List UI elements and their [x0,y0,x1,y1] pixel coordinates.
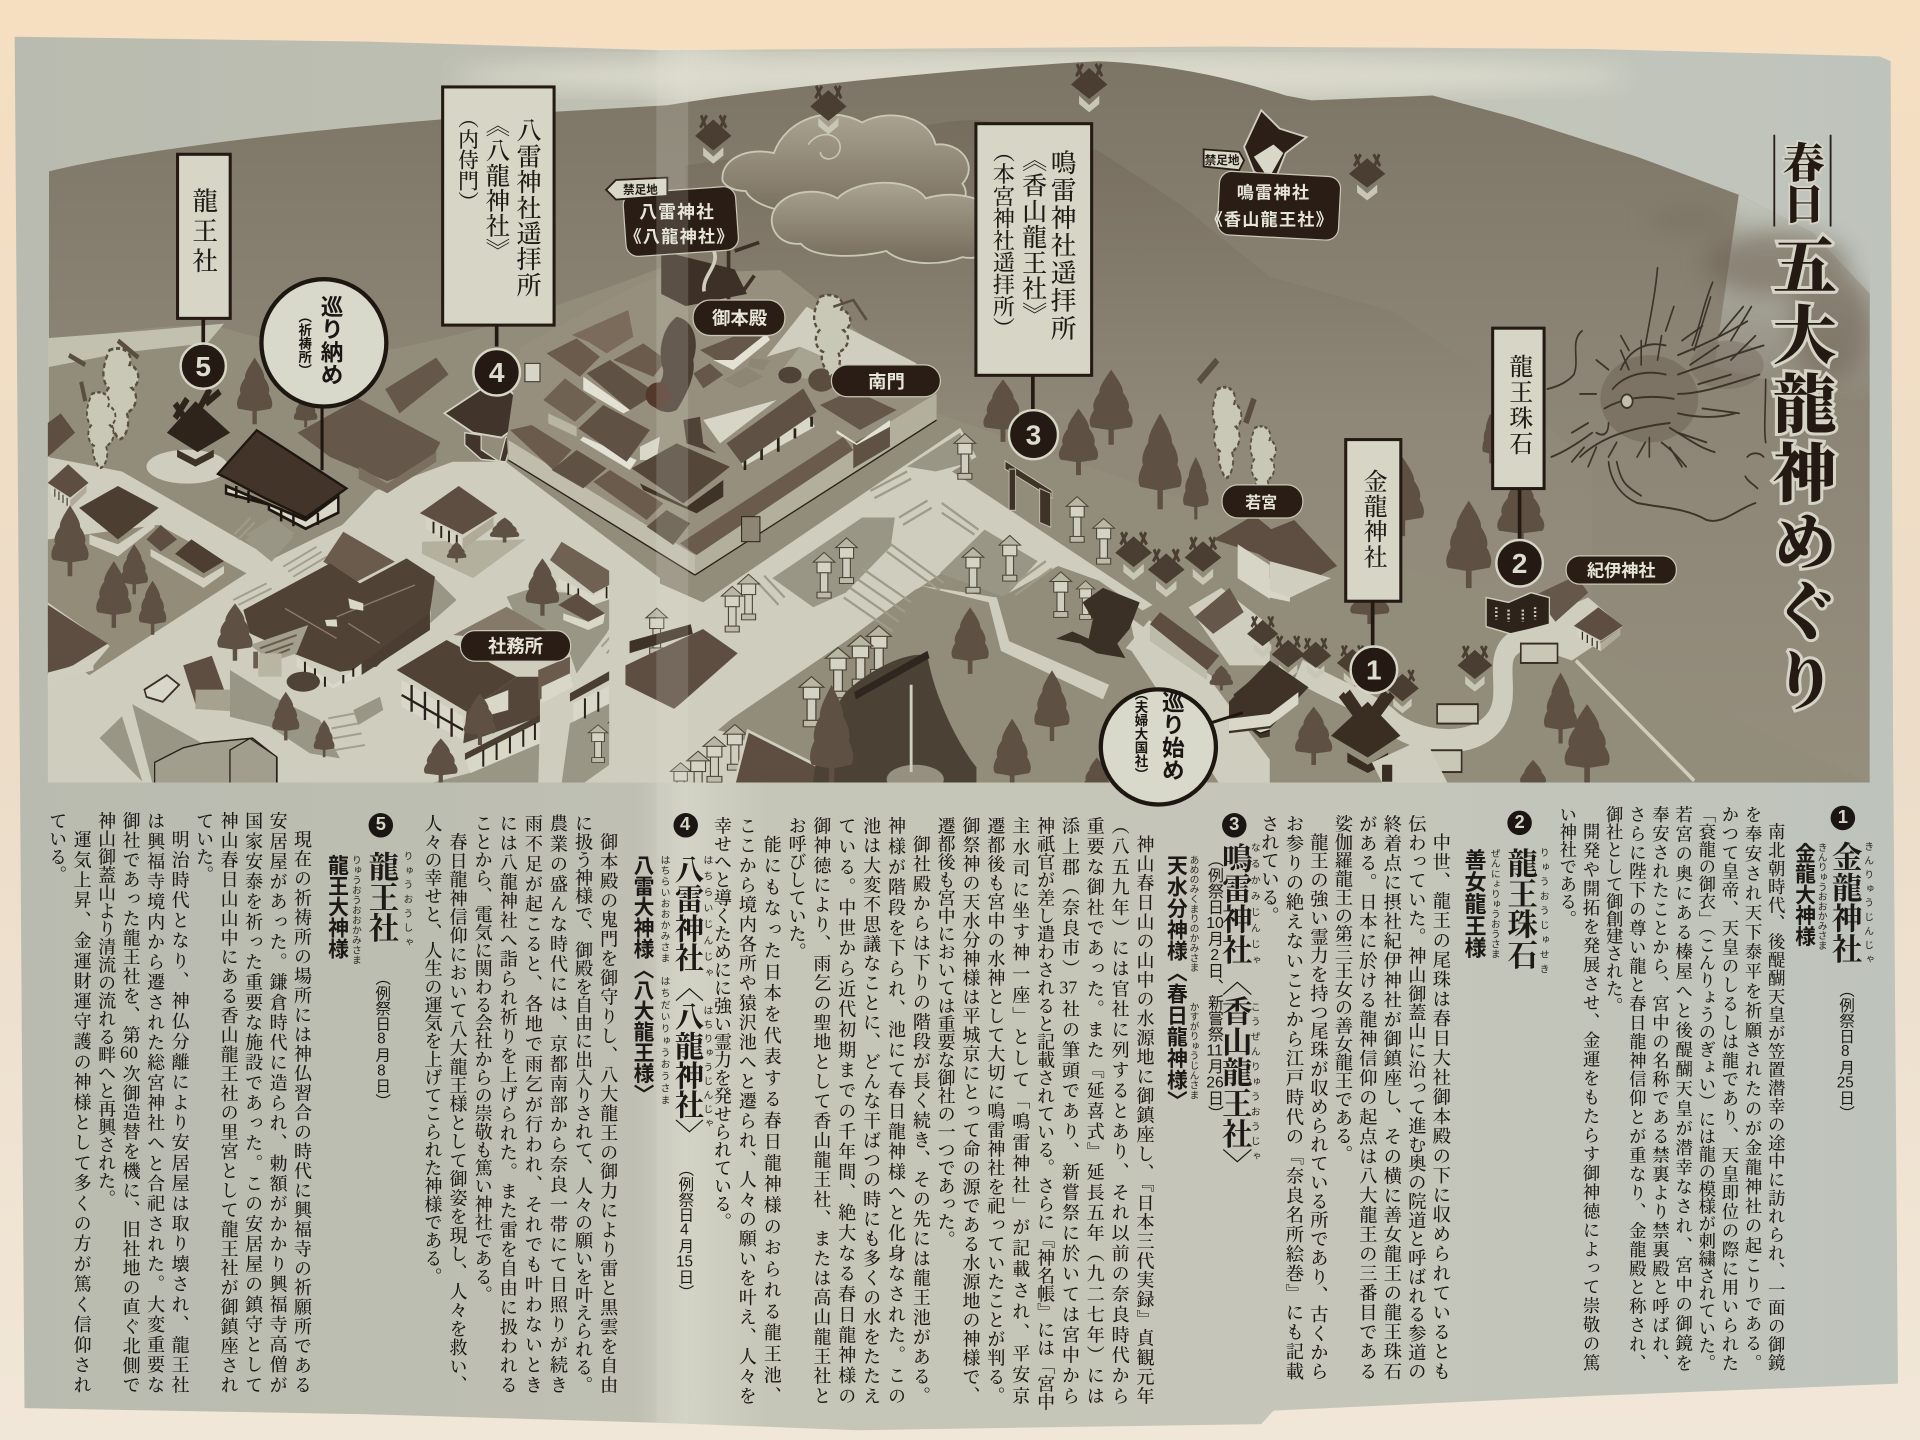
body text: お参りの絶えないことから江戸時代の『奈良名所絵巻』にも記載 [1283,814,1303,1380]
body text: 神山春日山の山中の水源地に御鎮座し、『日本三代実録』貞観元年 [1134,835,1153,1404]
small trees in the court [778,367,802,383]
body text: 遷都後も宮中の水神として大切に鳴雷神社を祀っていたことが判る。 [985,817,1004,1404]
article 4: 八雷神社 [422,813,714,1394]
body text: 中世、龍王の尾珠は春日大社御本殿の下に収められているとも [1430,833,1450,1380]
body text [422,814,618,1394]
reading 1: はちらいじんじゃ [703,855,714,977]
callout 3: Narukami shrine [976,124,1092,459]
forbidden-area shrine: Narukami [1244,110,1307,184]
label: Narukami shrine inner site: 禁足地 [1205,153,1240,167]
body text: 能にもなった日本を代表する春日龍神様のおられる龍王池、 [761,835,781,1404]
body text: ここから境内各所や猿沢池へと遷られ、人々の願いを叶え、人々を [736,817,756,1404]
label: Hachirai shrine inner site [606,178,739,257]
callout 3: Narukami shrine: 3 [1026,419,1041,450]
reading: りゅうおうじゅせき [1539,847,1550,973]
body text: 人々の幸せと、人生の運気を上げてこられた神様である。 [422,814,441,1285]
body text: ていた。 [193,812,213,884]
wakamiya buildings [1214,518,1272,561]
shrine 5 [167,389,230,467]
deity reading 2: はちだいりゅうおうさま [660,976,671,1104]
long shed [570,671,610,722]
dragon painting [1547,268,1766,521]
body text: お呼びしていた。 [786,817,806,961]
body text [711,816,1154,1411]
body text: を奉安され天下泰平を祈願されたのが金龍神社の起こりである。 [1743,806,1762,1371]
festival date: niiname: 新嘗祭 11 月 26 日） [1206,994,1224,1122]
pond and dark trees [813,655,976,787]
body text: 添上郡（奈良市） 37 社の筆頭であり、新嘗祭に於いては宮中から [1059,817,1079,1404]
body text: 神山御蓋山より清流の流れる畔へと再興された。 [96,812,115,1208]
main complex [243,532,435,688]
label: Hachirai shrine inner site: 禁足地 [623,182,658,196]
body text: に扱う神様で、御殿を自由に出入りされて、人々の願いを叶えられる。 [572,814,592,1394]
trees behind torii [983,379,1023,442]
deity name: 龍王大神様 [324,855,348,959]
number 5 [369,813,393,838]
body text [47,812,312,1393]
callout 5: Ryuo-sha [178,154,230,389]
article 3: 鳴雷神社 [711,813,1261,1411]
label: south gate [831,365,940,397]
deity reading: ぜんにょりゅうおうさま [1490,849,1501,959]
torii [1005,461,1052,527]
fences [1425,644,1558,772]
label: Wakamiya: 若宮 [1245,493,1277,512]
body text: 雨不足が起こると、各地で雨乞が行われ、それでも叶わないとき [522,814,542,1393]
body text: ている。 [47,812,66,884]
deity reading 2: かすがりゅうじんさま [1189,1002,1200,1100]
south gate [853,423,890,468]
body text: 遷都後も宮中においては重要な御社の一つであった。 [935,817,955,1249]
deity name: 八雷大神様〈八大龍王様〉 [630,855,653,1104]
body text: 池は大変不思議なことに、どんな干ばつの時にも多くの水をたたえ [860,817,880,1404]
label: Kii shrine [1566,556,1676,584]
shrine 1 [1331,692,1400,773]
number 2 [1507,811,1532,835]
wisteria right [1213,387,1241,478]
heading: 金龍神社 [1828,841,1861,964]
festival date: annual: （例祭日 10 月 2 日、 [1206,851,1224,994]
body text: 御祭神の天水分神様は平城京にとって命の源である水源地の神様で、 [960,817,979,1404]
paper highlight near the top fold [453,56,1629,96]
number 3 [1222,813,1247,838]
label: Narukami shrine inner site: 鳴雷神社 [1237,182,1310,202]
right wall roof strip [680,437,853,555]
main precinct [507,270,937,575]
callout 3: Narukami shrine: 《香山龍王社》 [1019,147,1047,327]
body text: 運気上昇、金運財運守護の神様として多くの方が篤く信仰され [71,830,91,1393]
body text: 重要な御社であった。また『延喜式』延長五年（九二七年）には [1084,817,1104,1404]
label: Wakamiya [1222,485,1303,518]
label: shrine office: 社務所 [488,636,543,657]
hall roofs behind the tree [700,337,767,368]
centre roads, stairs and lanterns [609,360,1290,804]
front mountain [688,120,1192,216]
festival date: （例祭日 4 月 15 日） [676,1161,693,1300]
callout: pilgrimage end [261,279,386,470]
fading upper right [1714,195,1870,380]
illustrated map of the shrine grounds [48,61,1870,804]
lantern basin near 4 [524,370,544,387]
lower ground [114,268,661,348]
deity name: 天水分神様〈春日龍神様〉 [1163,855,1187,1112]
body text [1557,806,1785,1371]
body text: されている。 [1259,814,1278,924]
callout 3: Narukami shrine: 鳴雷神社遥拝所 [1047,149,1076,342]
wisteria in the court [814,295,850,376]
deity reading 1: あめのみくまりのかみさま [1189,855,1200,972]
article 5: 龍王社 [47,812,414,1393]
reading: りゅうおうしゃ [403,851,414,947]
body text: 主水司に坐す神一座」として「鳴雷神社」が記載され、平安京 [1010,817,1029,1404]
callout 4: Hachirai shrine: 《八龍神社》 [482,113,510,263]
lantern basin and gate piers [525,363,540,382]
callout: pilgrimage end: （祈祷所） [296,310,312,377]
body text: 伝わっていた。神山御蓋山に沿って進む奥の院道と呼ばれる参道の [1406,814,1425,1380]
label: Hachirai shrine inner site: 八雷神社 [639,202,715,222]
shrine row [1115,532,1152,580]
label: shrine office [460,631,571,661]
body text: （八五九年）には官社に列するとあり、それ以前の奈良時代から [1109,817,1129,1404]
prayer hall [218,430,346,529]
shrine 4 [442,390,514,462]
body text: ことから、電気に関わる会社からの崇敬も篤い神社である。 [472,814,492,1304]
central paper fold shading [656,49,688,1427]
house in the plaza [420,486,497,550]
deity name: 金龍大神様 [1791,842,1815,947]
body text: かつて皇帝、天皇のしるしは龍であり、天皇即位の際に用いられた [1719,806,1739,1371]
callout 4: Hachirai shrine [443,87,554,396]
body text: 神祇官が差し遣わされると記載されている。さらに『神名帳』には「宮中 [1034,817,1054,1411]
number 2: 2 [1514,812,1525,833]
body text: 御社殿からは下りの階段が長く続き、その先には龍王池がある。 [910,835,930,1404]
heading: 龍王珠石 [1503,847,1536,970]
triangular patches [100,716,142,782]
body text: 奉安されたことから、宮中の名称である禁裏より禁裏殿と呼ばれ、 [1650,806,1670,1371]
body text: 開発や開拓を発展させ、金運をもたらす御神徳によって崇敬の篤 [1581,823,1600,1371]
callout: pilgrimage start: （夫婦大国社） [1132,687,1148,781]
number 5: 5 [376,814,386,835]
body text: 神山春日山山中にある香山龍王社の里宮として龍王社が御鎮座され [218,812,238,1393]
label: south gate: 南門 [868,371,905,392]
body text: 春日龍神信仰において八大龍王様として御姿を現し、人々を救い、 [447,832,467,1393]
sacred tree [646,317,717,453]
north-side roofs [572,310,633,353]
callout 1: Kinryu shrine: 1 [1366,655,1382,686]
callout: pilgrimage start: 巡り始め [1159,691,1185,781]
mountain shrines [695,64,1385,200]
ink smoke behind title [1705,214,1870,382]
wall gate [742,517,760,542]
body text: 南北朝時代、後醍醐天皇が笠置潜幸の途中に訪れられ、一面の御鏡 [1766,823,1785,1371]
festival date: （例祭日 8 月 25 日） [1837,982,1854,1121]
callout 5: Ryuo-sha: 龍王社 [189,187,218,277]
number 3: 3 [1229,814,1239,835]
reading 1: なるかみじんじゃ [1250,842,1261,965]
body text: 国家安泰を祈った重要な施設であった。この安居屋の鎮守として [242,812,262,1393]
deity reading: りゅうおうおおかみさま [351,855,362,965]
central hall [640,480,723,513]
number 1 [1831,806,1855,830]
body text: 若宮の奥にある榛屋へと後醍醐天皇が潜幸なされ、宮中の御鏡を [1673,806,1693,1371]
label: Kii shrine: 紀伊神社 [1587,561,1655,581]
body text: 農業の盛んな時代には、京都南部から奈良一帯にて日照りが続き [547,814,567,1393]
body text: には八龍神社へ詣られ祈りを上げられた。また雷を自由に扱われる [497,814,517,1393]
body text: は興福寺境内から遷された総宮神社へと合祀された。大変重要な [144,812,164,1393]
callout 4: Hachirai shrine: 八雷神社遥拝所 [513,118,542,298]
reading: きんりゅうじんじゃ [1864,841,1875,964]
hall left of the stairs [625,629,738,709]
festival date: （例祭日 8 月 8 日） [373,970,390,1109]
callout 1: Kinryu shrine: 金龍神社 [1360,469,1388,569]
number 4: 4 [680,814,690,835]
callout 2: Ryuo jewel stone [1493,328,1544,587]
light court [703,400,777,443]
deity reading: きんりゅうおおかみさま [1817,842,1828,950]
heading: 龍王社 [364,851,397,943]
honden roof and torii behind the main hall [661,242,759,306]
deity name: 善女龍王様 [1462,849,1487,959]
body text: 御神徳により、雨乞の聖地として香山龍王社、または高山龍王社と [811,817,830,1404]
label: Narukami shrine inner site [1204,149,1341,241]
title: 五大龍神めぐり [1759,233,1850,717]
label: Narukami shrine inner site: 《香山龍王社》 [1206,209,1334,229]
body text: い神社である。 [1557,806,1577,927]
number 1: 1 [1838,807,1848,828]
wisteria [103,348,138,439]
callout: pilgrimage start [1101,687,1243,804]
callout 4: Hachirai shrine: （内侍門） [455,108,479,212]
callout 2: Ryuo jewel stone: 2 [1512,548,1527,579]
body text: ている。中世から近代初期までの千年間、絶大なる春日龍神様の [836,817,855,1404]
title: 春日 [1774,140,1834,224]
label: main hall [693,300,785,336]
dragon statue [1056,588,1140,658]
shrine office [397,607,573,773]
rear houses [550,542,610,630]
body text: 龍王の強い霊力を持つ尾珠が収められている所であり、古くから [1308,833,1327,1380]
cloud [722,114,1002,263]
back mountain [49,61,1870,784]
deity reading 1: はちらいおおかみさま [660,855,671,962]
body text: 現在の祈祷所の場所には神仏習合の時代に興福寺の祈願所である [291,830,311,1393]
body text: 「袞龍の御衣」（こんりょうのぎょい）には龍の模様が刺繍されていた。 [1696,806,1716,1371]
heading: 八雷神社〈八龍神社〉 [669,855,701,1149]
body text: がある。日本に於ける龍神信仰の起点は八大龍王の三番目である [1357,814,1376,1380]
number 4 [673,813,697,838]
left section of the map [48,324,660,784]
office quarter: main complex and shrine office [217,532,610,782]
south-side roofs [510,425,572,470]
buildings left [48,413,75,457]
callout: pilgrimage end: 巡り納め [318,295,344,386]
callout 1: Kinryu shrine [1346,440,1401,693]
heading: 鳴雷神社〈香山龍王社〉 [1218,842,1251,1179]
callout 2: Ryuo jewel stone: 龍王珠石 [1505,354,1533,457]
body text: 娑伽羅龍王の第三王女の善女龍王である。 [1332,814,1352,1163]
reading 2: こうぜんりゅうおうじゃ [1250,1002,1261,1161]
body text: 御社であった龍王社を、第 60 次御造替を機に、旧社地の直ぐ北側で [120,812,140,1393]
small car and shed [144,656,236,711]
body text: 幸せへと導くためにに強い霊力を発せられている。 [711,817,731,1231]
body text [1259,814,1451,1380]
road to Kii shrine [1298,639,1523,741]
body text: 神様が階段を下られ、池にて春日龍神様へと化身なされた。この [885,817,905,1404]
reading 2: はちりゅうじんじゃ [703,1005,714,1128]
body text: 明治時代となり、神仏分離により安居屋は取り壊され、龍王社 [169,830,189,1393]
body text: 御社として御創建された。 [1604,806,1623,1014]
label: Hachirai shrine inner site: 《八龍神社》 [625,226,735,246]
article 2: 龍王珠石 [1259,810,1550,1380]
callout 4: Hachirai shrine: 4 [489,357,505,388]
label: main hall: 御本殿 [712,307,768,328]
body text: 安居屋があった。鎌倉時代に造られ、勅額がかかり興福寺高僧が [267,812,287,1393]
callout 3: Narukami shrine: （本宮神社遥拝所） [990,141,1015,339]
article 1: 金龍神社 [1557,806,1875,1371]
body text: 終着点に摂社紀伊神社が御鎮座し、その横に善女龍王の龍王珠石 [1381,814,1401,1380]
east corridor [742,417,815,467]
callout 5: Ryuo-sha: 5 [195,351,211,382]
body text: 御本殿の鬼門を御守りし、八大龍王の御力により雷と黒雲を自由 [598,832,617,1393]
body text: さらに陛下の尊い龍と春日龍神信仰とが重なり、金龍殿と称され、 [1627,806,1646,1371]
Kii shrine gate [1486,593,1549,634]
buildings behind prayer hall [297,399,440,481]
right section of the map [1229,268,1766,802]
